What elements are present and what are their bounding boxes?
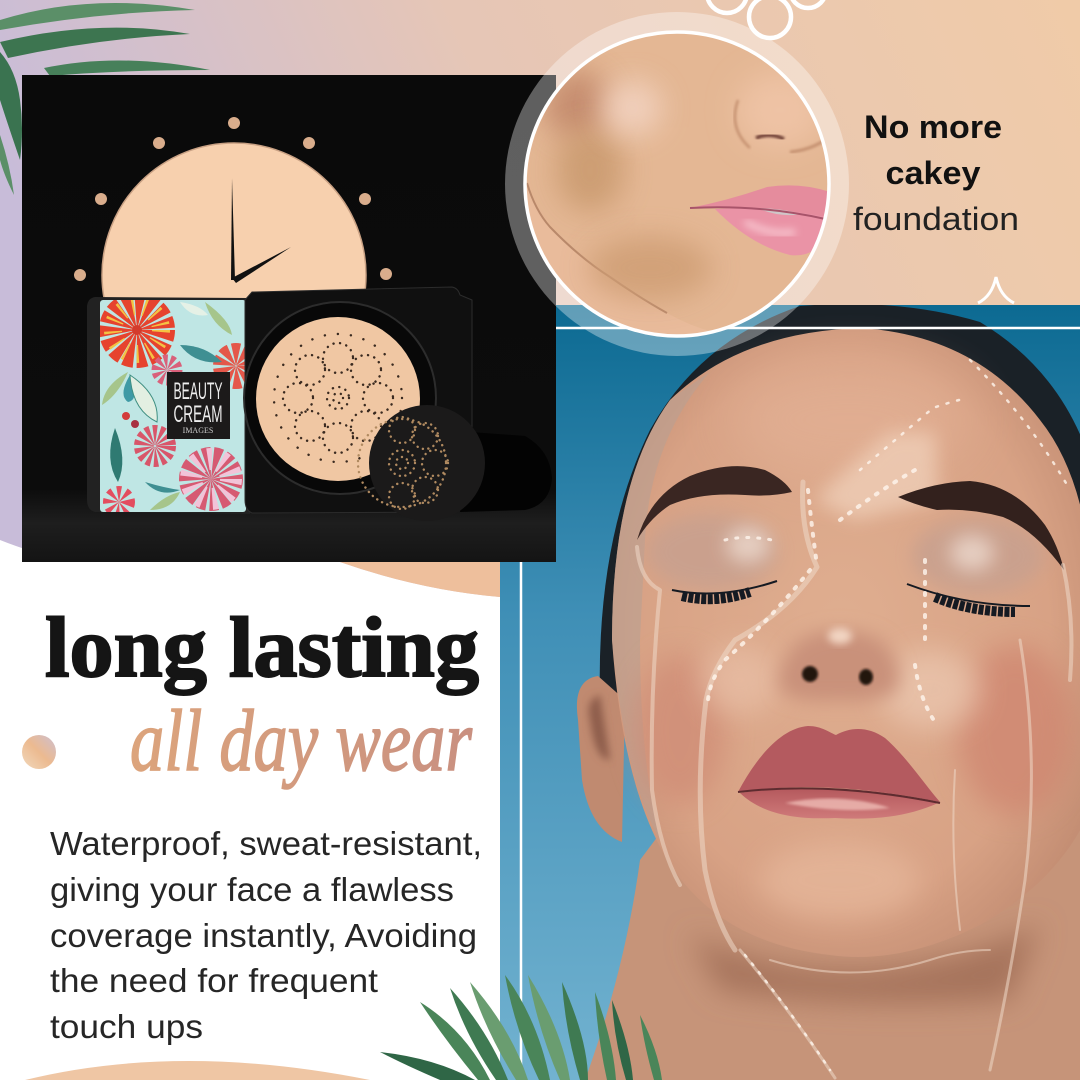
wet temple band [612,372,710,840]
label: beauty cream: CREAM [174,401,222,428]
text block: description: coverage instantly, Avoiding [50,917,477,954]
face [612,328,1080,957]
panel: model photo [500,304,1080,1080]
eyelash left [672,581,777,599]
mushroom puff [358,405,552,521]
ear [577,676,625,842]
decorative bubbles top [707,0,1014,303]
decorative dot [22,735,56,769]
text block: description: giving your face a flawless [50,871,454,908]
panel: product photo [22,75,556,562]
eyelash right [907,584,1030,612]
eyelid left [646,514,778,590]
hair [600,304,1080,760]
text block: description: touch ups [50,1008,203,1045]
nose [779,628,899,701]
text: no more cakey foundation: No more [864,109,1002,145]
cushion case [244,287,472,513]
heading: long lasting: long lasting [45,599,479,695]
text block: description [50,825,482,1045]
clock compact [74,117,392,407]
floral lid [87,297,250,514]
neck [588,830,1080,1080]
text: no more cakey foundation: foundation [853,201,1019,237]
label: beauty cream: BEAUTY [174,378,222,405]
footer accent [25,1061,370,1080]
text: no more cakey foundation: cakey [886,155,981,191]
water streaks [637,360,1071,1078]
icon: palm leaf top left [0,3,210,195]
wet patch between brows [815,432,938,520]
label: beauty cream: IMAGES [183,426,213,435]
cheek shading [635,365,1073,918]
inset circle: cakey skin [505,12,849,356]
text: no more cakey foundation [853,109,1019,237]
text block: description: Waterproof, sweat-resistant, [50,825,482,862]
subheading: all day wear: all day wear [130,693,473,790]
label: beauty cream [167,372,230,439]
eyebrow left [637,466,792,540]
icon: palm leaf bottom [380,975,662,1080]
frame lines [521,328,1080,1080]
text block: description: the need for frequent [50,962,378,999]
eyelid right [912,518,1044,594]
lips [738,726,940,819]
eyebrow right [898,481,1064,570]
